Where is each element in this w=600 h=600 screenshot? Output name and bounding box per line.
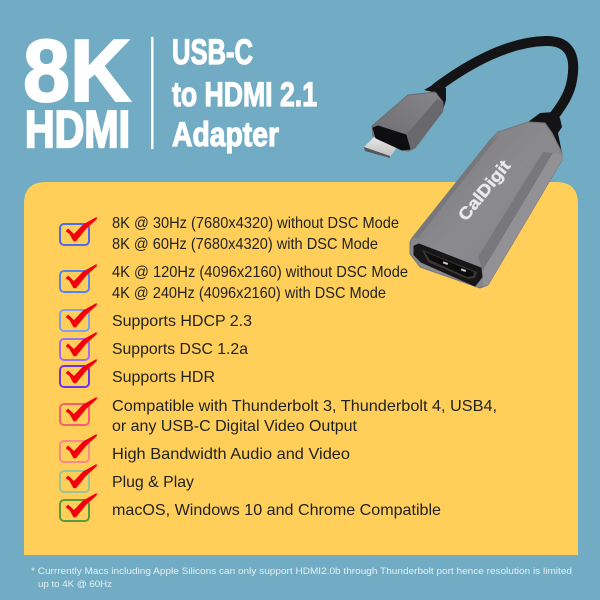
USB-C housing xyxy=(372,92,443,151)
feature list text: 4K @ 240Hz (4096x2160) with DSC Mode xyxy=(112,285,386,302)
checkbox: audio and video xyxy=(60,434,97,462)
checkbox: HDR xyxy=(60,359,97,387)
footnote: * Currrently Macs including Apple Silicons can only support HDMI2.0b through Thunderbolt port hence resolution is limited xyxy=(31,566,572,577)
adapter illustration xyxy=(364,41,573,288)
strain relief: HDMI end xyxy=(528,112,562,153)
checkbox: 8K xyxy=(60,217,97,245)
HDMI port xyxy=(414,244,482,286)
checkbox: 4K xyxy=(60,264,97,292)
feature list text: Plug & Play xyxy=(112,474,194,491)
footnote: up to 4K @ 60Hz xyxy=(38,579,112,590)
strain relief: USB-C end xyxy=(424,83,446,110)
logo: CalDigit: CalDigit xyxy=(454,156,515,225)
feature list text: Supports HDR xyxy=(112,369,215,386)
checkbox: plug and play xyxy=(60,464,97,492)
subtitle: USB-C to HDMI 2.1 Adapter: USB-C xyxy=(172,33,253,72)
checkbox: compatibility xyxy=(60,397,97,425)
title divider xyxy=(151,37,154,149)
feature list text: 8K @ 30Hz (7680x4320) without DSC Mode xyxy=(112,215,399,232)
title: 8K HDMI xyxy=(23,21,131,159)
subtitle: USB-C to HDMI 2.1 Adapter: Adapter xyxy=(172,116,279,154)
checkbox: DSC xyxy=(60,332,97,360)
checkbox: HDCP xyxy=(60,303,97,331)
feature list text: 8K @ 60Hz (7680x4320) with DSC Mode xyxy=(112,236,378,253)
footnote xyxy=(31,566,572,590)
title: 8K HDMI: 8K xyxy=(23,21,131,120)
cable xyxy=(436,41,573,116)
subtitle: USB-C to HDMI 2.1 Adapter xyxy=(172,33,317,154)
checkbox: OS compatibility xyxy=(60,493,97,521)
panel: features xyxy=(24,182,578,555)
feature list text: Supports HDCP 2.3 xyxy=(112,313,252,330)
feature list text: or any USB-C Digital Video Output xyxy=(112,418,358,435)
feature list text: 4K @ 120Hz (4096x2160) without DSC Mode xyxy=(112,264,408,281)
feature list text: High Bandwidth Audio and Video xyxy=(112,446,350,463)
feature list text xyxy=(112,215,497,519)
feature list text: Compatible with Thunderbolt 3, Thunderbolt 4, USB4, xyxy=(112,398,497,415)
title: 8K HDMI: HDMI xyxy=(25,101,130,159)
adapter body xyxy=(410,122,562,288)
feature list text: macOS, Windows 10 and Chrome Compatible xyxy=(112,502,441,519)
subtitle: USB-C to HDMI 2.1 Adapter: to HDMI 2.1 xyxy=(172,76,317,114)
USB-C plug tip xyxy=(364,136,400,158)
feature list text: Supports DSC 1.2a xyxy=(112,341,248,358)
